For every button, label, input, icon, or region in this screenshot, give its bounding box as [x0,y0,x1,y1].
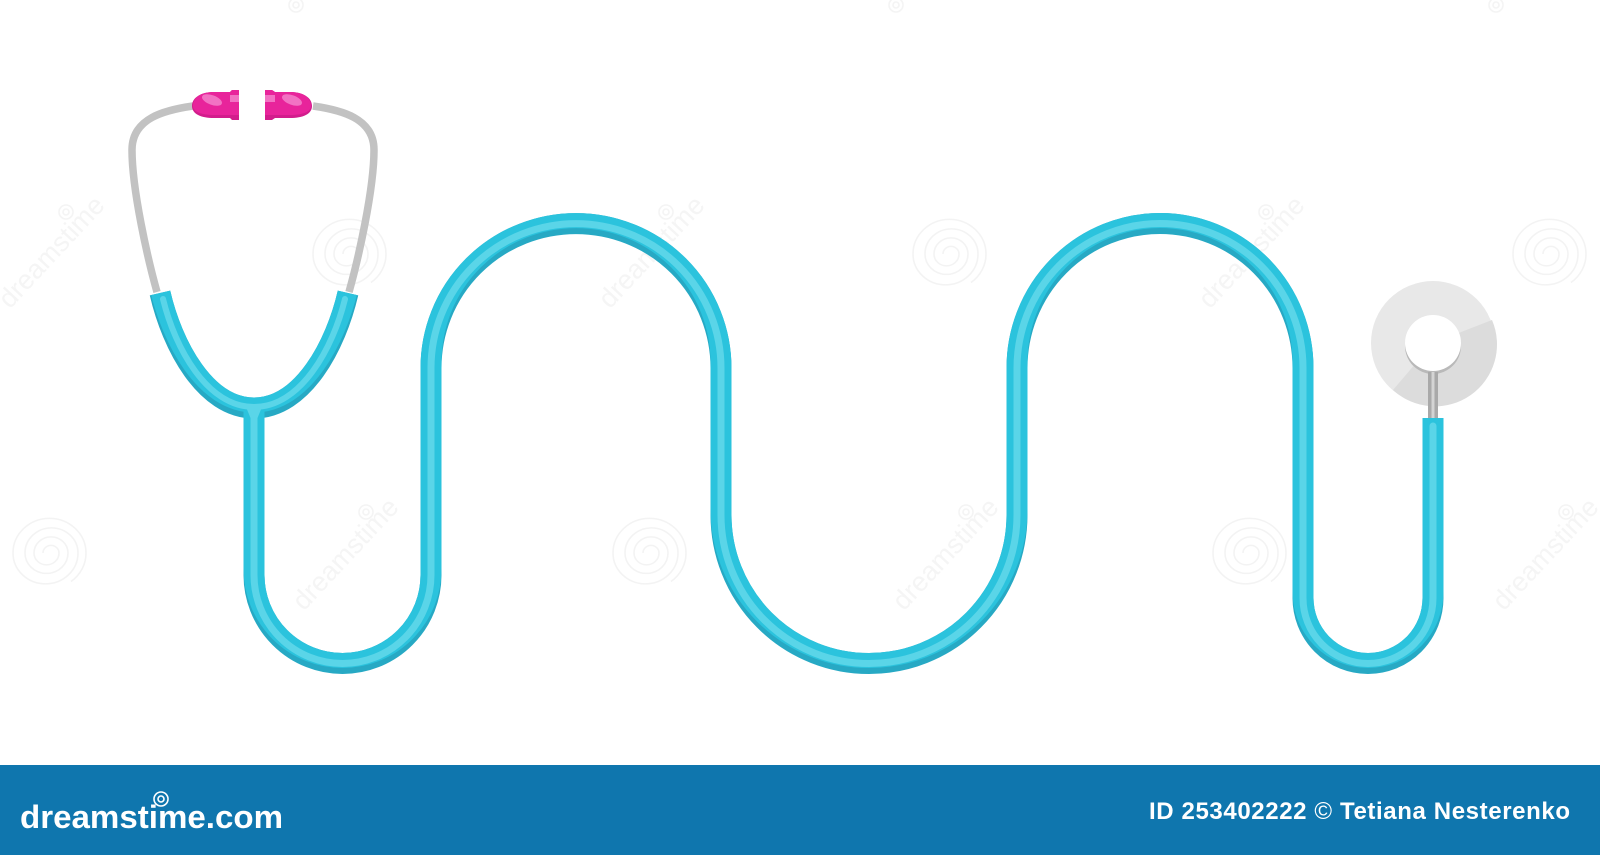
watermark spirals and text [0,0,1600,616]
left earpiece [192,90,239,120]
main wavy tube [243,218,1444,664]
footer bar [0,765,1600,855]
chest piece disc [1371,281,1497,406]
grey ear tubes [132,106,374,292]
watermark spirals and text: dreamstime [592,190,710,314]
watermark spirals and text: dreamstime [1192,190,1310,314]
image ID and author credit: ID 253402222 © Tetiana Nesterenko [1149,798,1570,825]
watermark spirals and text: dreamstime [886,492,1004,616]
Y-shaped yoke tube [146,277,362,408]
watermark spirals and text: dreamstime [286,492,404,616]
brand logo text: dreamstime.com [20,799,283,835]
chest piece stem [1428,372,1438,418]
yoke highlight and junction flare [163,299,345,418]
right earpiece [265,90,312,120]
